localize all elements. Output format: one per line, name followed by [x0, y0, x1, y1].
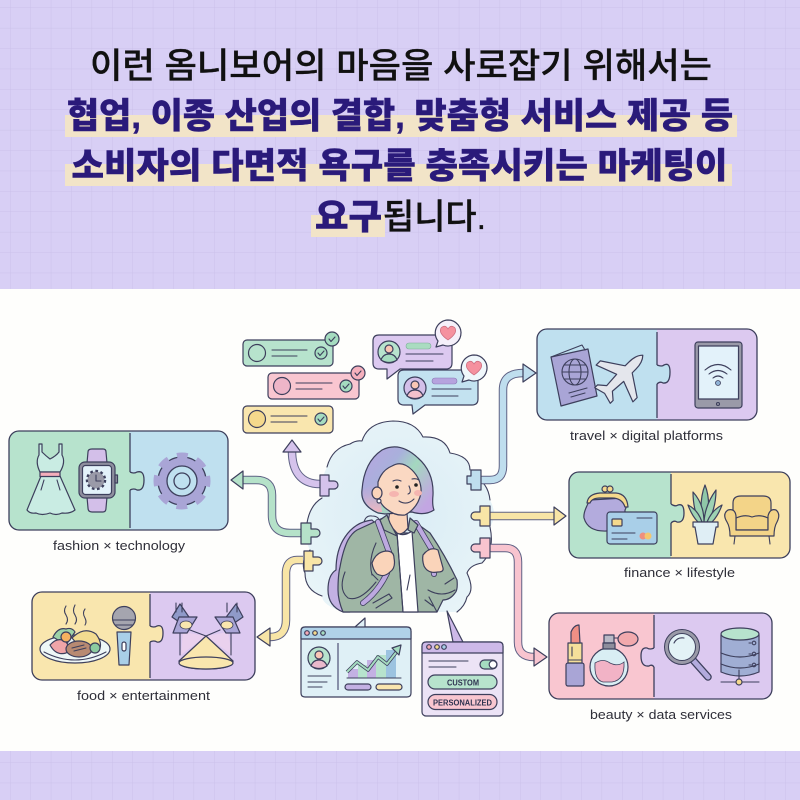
CUSTOM pill: CUSTOM: [447, 678, 479, 688]
fashion puzzle knob: [130, 472, 144, 490]
arrow: pink to beauty: [471, 538, 547, 666]
white content panel: [0, 289, 800, 751]
arrow: purple to check cards: [283, 440, 338, 496]
panel: beauty × data services: [549, 613, 772, 699]
icon: spotlights: [172, 603, 243, 669]
cloud behind person: [303, 421, 494, 612]
right strap: [416, 523, 434, 574]
food right piece: [150, 592, 255, 680]
right hand: [423, 549, 443, 572]
light beams: [181, 632, 206, 655]
travel puzzle knob: [657, 364, 670, 384]
headline: [65, 47, 737, 237]
dashboard body: [301, 618, 411, 697]
label: finance: finance × lifestyle: [624, 565, 735, 580]
icon: lipstick: [566, 625, 584, 686]
arrow: yellow to food: [257, 551, 322, 646]
right lamp: [215, 603, 243, 633]
finance puzzle knob: [671, 504, 684, 523]
user avatar: [308, 647, 330, 669]
travel frame: [537, 329, 757, 420]
blue bubble: [398, 370, 478, 414]
shirt: [397, 531, 418, 612]
label: beauty: beauty × data services: [590, 707, 733, 722]
left hand: [372, 551, 394, 576]
face: [378, 464, 421, 515]
icon: potted plant: [688, 485, 722, 544]
food left piece: [32, 592, 150, 680]
icon: plane: [584, 337, 661, 414]
label: food: food × entertainment: [77, 688, 210, 703]
panel: fashion × technology: [9, 431, 228, 530]
finance right piece: [671, 472, 790, 558]
hair tint: [363, 480, 382, 512]
icon: smartwatch: [79, 449, 118, 512]
green card: [243, 332, 339, 366]
pink card: [268, 366, 365, 399]
fashion frame: [9, 431, 228, 530]
neck and collar: [388, 510, 408, 534]
icon: gear: [158, 456, 206, 506]
panel: travel × digital platforms: [537, 329, 757, 420]
headline line 4: 요구: [315, 198, 382, 237]
icon: microphone: [112, 606, 136, 665]
bar chart: [347, 645, 401, 678]
personalization window: [422, 611, 503, 716]
icon: magnifier: [666, 632, 708, 677]
fashion right piece: [130, 431, 228, 530]
icon: perfume: [590, 632, 638, 686]
arrow: green to fashion: [231, 471, 320, 544]
ear and earring: [372, 487, 382, 503]
headline line 1: 이런 옴니보어의 마음을 사로잡기 위해서는: [90, 47, 712, 86]
icon: passport: [551, 345, 597, 406]
chat bubbles: [373, 320, 487, 414]
left lamp: [172, 603, 197, 633]
icon: credit card: [607, 512, 657, 544]
icon: armchair: [725, 496, 779, 544]
icon: purse: [584, 486, 628, 531]
facial features: [389, 479, 422, 503]
food frame: [32, 592, 255, 680]
person: [328, 447, 457, 612]
personalization body: [422, 642, 503, 716]
label: fashion: fashion × technology: [53, 538, 186, 553]
headline line 2: 협업, 이종 산업의 결합, 맞춤형 서비스 제공 등: [67, 97, 733, 136]
finance left piece: [569, 472, 671, 558]
yellow card: [243, 406, 333, 433]
jacket: [338, 518, 457, 612]
finance frame: [569, 472, 790, 558]
icon: tablet: [695, 342, 742, 408]
icon: food plate: [40, 605, 110, 663]
heart bubble 1: [435, 320, 461, 347]
beauty frame: [549, 613, 772, 699]
backpack: [328, 520, 382, 612]
check cards: [243, 332, 365, 433]
beauty puzzle knob: [641, 648, 654, 667]
icon: dress: [27, 444, 75, 514]
cone of light: [179, 636, 233, 669]
fashion left piece: [9, 431, 130, 530]
hair: [362, 447, 434, 514]
arrow: yellow to finance: [471, 506, 566, 526]
panel: finance × lifestyle: [569, 472, 790, 558]
dashboard header: [301, 627, 411, 639]
jacket details: [342, 533, 455, 612]
personalization header: [422, 642, 503, 653]
highlight bars: [65, 115, 737, 237]
headline line 3: 소비자의 다면적 욕구를 충족시키는 마케팅이: [72, 147, 728, 186]
toggle: [480, 660, 497, 669]
food puzzle knob: [150, 626, 163, 642]
travel left piece: [537, 329, 657, 420]
heart bubble 2: [461, 355, 487, 382]
icon: database: [721, 628, 759, 685]
beauty left piece: [549, 613, 654, 699]
backpack handle: [364, 516, 380, 524]
label: travel: travel × digital platforms: [570, 428, 724, 443]
travel right piece: [657, 329, 757, 420]
panel: food × entertainment: [32, 592, 255, 680]
headline line 4 end: 됩니다.: [383, 198, 486, 237]
left strap: [363, 522, 389, 603]
arrow: blue to travel: [467, 364, 536, 490]
dashboard window: [301, 618, 411, 697]
PERSONALIZED pill: PERSONALIZED: [433, 698, 492, 708]
beauty right piece: [654, 613, 772, 699]
lilac bubble: [373, 335, 452, 379]
personalization tail: [447, 611, 463, 642]
